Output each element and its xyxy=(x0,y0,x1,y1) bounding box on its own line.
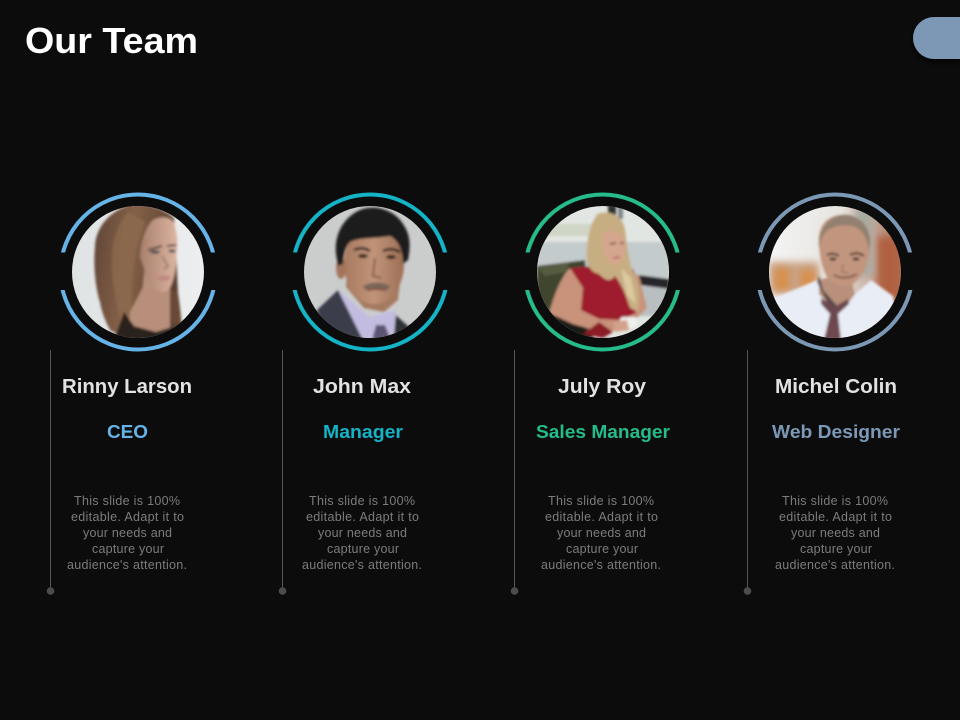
portrait: John Max xyxy=(304,206,436,340)
team member: John Max xyxy=(279,194,453,595)
description: editable. Adapt it to xyxy=(545,510,658,524)
description: your needs and xyxy=(791,526,880,540)
description: This slide is 100% xyxy=(782,494,888,508)
team member: Rinny Larson xyxy=(47,194,221,595)
vertical line with dot xyxy=(279,350,286,595)
ring: John Max xyxy=(287,194,453,350)
portrait: Rinny Larson xyxy=(72,204,204,340)
description xyxy=(775,494,895,572)
description xyxy=(541,494,661,572)
description: your needs and xyxy=(318,526,407,540)
name: John Max xyxy=(313,376,411,398)
description xyxy=(302,494,422,572)
description xyxy=(67,494,187,572)
ring: Rinny Larson xyxy=(55,194,221,350)
role: Sales Manager xyxy=(536,422,670,442)
description: capture your xyxy=(566,542,638,556)
role: Manager xyxy=(323,422,403,442)
name: July Roy xyxy=(558,376,647,398)
vertical line with dot xyxy=(511,350,518,595)
description: capture your xyxy=(92,542,164,556)
vertical line with dot xyxy=(744,350,751,595)
vertical line with dot xyxy=(47,350,54,595)
description: your needs and xyxy=(557,526,646,540)
description: editable. Adapt it to xyxy=(71,510,184,524)
description: capture your xyxy=(327,542,399,556)
description: audience's attention. xyxy=(302,558,422,572)
portrait: July Roy xyxy=(537,205,669,338)
title: Our Team xyxy=(25,20,198,61)
team member: July Roy xyxy=(511,194,686,595)
description: editable. Adapt it to xyxy=(779,510,892,524)
ring: Michel Colin xyxy=(752,194,918,350)
description: audience's attention. xyxy=(541,558,661,572)
description: audience's attention. xyxy=(775,558,895,572)
description: This slide is 100% xyxy=(548,494,654,508)
description: capture your xyxy=(800,542,872,556)
role: Web Designer xyxy=(772,422,900,442)
description: editable. Adapt it to xyxy=(306,510,419,524)
description: audience's attention. xyxy=(67,558,187,572)
team member: Michel Colin xyxy=(744,194,918,595)
description: This slide is 100% xyxy=(309,494,415,508)
ring: July Roy xyxy=(519,194,686,350)
accent tab xyxy=(913,17,960,59)
role: CEO xyxy=(107,422,148,442)
name: Rinny Larson xyxy=(62,376,192,398)
description: This slide is 100% xyxy=(74,494,180,508)
portrait: Michel Colin xyxy=(769,206,901,340)
name: Michel Colin xyxy=(775,376,897,398)
description: your needs and xyxy=(83,526,172,540)
